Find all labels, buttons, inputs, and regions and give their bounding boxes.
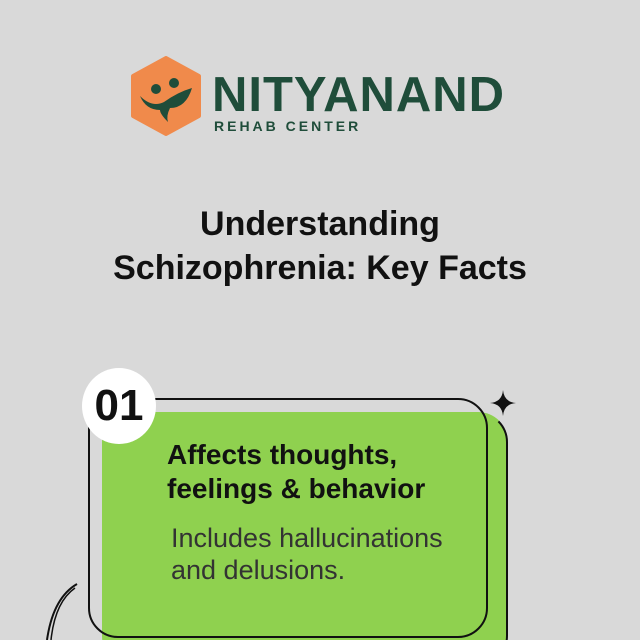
panel: fact 01 — [82, 368, 508, 640]
logo — [131, 56, 505, 136]
badge: 01: 01 — [95, 381, 143, 430]
text: and delusions. — [171, 555, 345, 585]
text: Includes hallucinations — [171, 523, 443, 553]
card back — [102, 412, 508, 640]
heading: Affects thoughts, — [167, 439, 397, 470]
brand name: NITYANAND — [212, 68, 505, 122]
icon: sparkle — [490, 390, 516, 416]
badge: 01 — [82, 368, 156, 444]
title — [113, 205, 527, 287]
heading: feelings & behavior — [167, 473, 425, 504]
title: Understanding — [200, 205, 440, 243]
title: Schizophrenia: Key Facts — [113, 249, 527, 287]
tagline: REHAB CENTER — [214, 118, 361, 134]
heading — [167, 439, 425, 504]
icon: curved strokes — [46, 583, 78, 640]
text — [171, 523, 443, 585]
card front outline — [88, 398, 488, 638]
icon: hexagon logo — [131, 56, 201, 136]
